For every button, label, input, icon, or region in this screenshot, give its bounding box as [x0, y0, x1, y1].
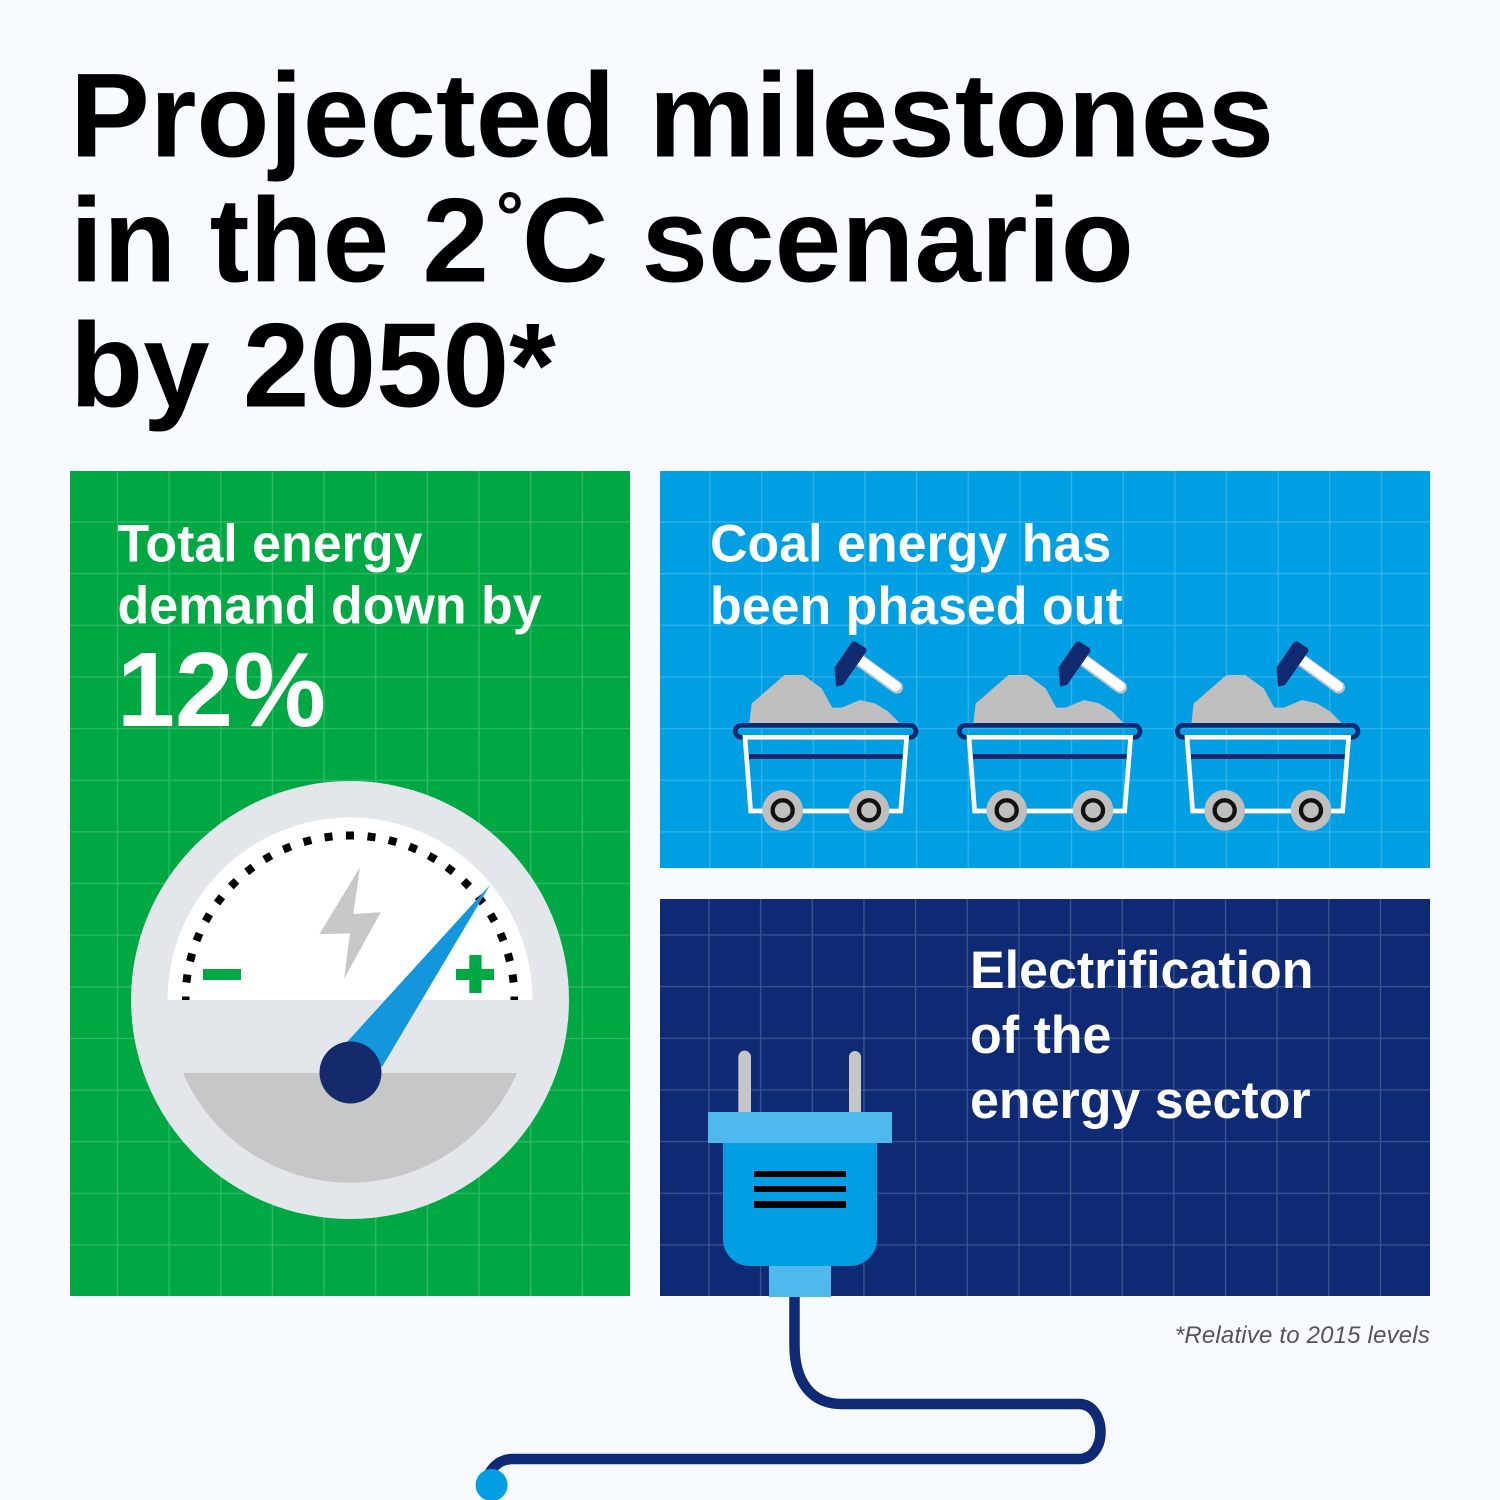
- icon: cord end: [476, 1469, 508, 1500]
- heading: electrification of the energy sector: [970, 942, 1313, 1130]
- title: in the 2: [70, 174, 489, 308]
- heading: total energy demand down by: [118, 515, 542, 636]
- stat: 12%: 12%: [117, 631, 326, 749]
- heading: coal energy has been phased out: Coal energy has: [710, 515, 1111, 574]
- heading: electrification of the energy sector: energy sector: [970, 1072, 1311, 1130]
- footnote: *Relative to 2015 levels: [1175, 1322, 1430, 1349]
- heading: electrification of the energy sector: Electrification: [970, 942, 1313, 1000]
- heading: total energy demand down by: demand down by: [118, 577, 542, 636]
- title: C scenario: [522, 174, 1134, 308]
- title: °: [496, 177, 524, 256]
- icon: coal cart 3: [1177, 642, 1358, 831]
- icon: coal cart 2: [959, 642, 1140, 831]
- icon: coal cart 1: [735, 642, 916, 831]
- heading: coal energy has been phased out: [710, 515, 1123, 636]
- icon: plug: [708, 1051, 892, 1297]
- heading: coal energy has been phased out: been phased out: [710, 578, 1123, 636]
- panel: total energy demand: [70, 471, 630, 1296]
- heading: total energy demand down by: Total energy: [118, 515, 422, 574]
- title: Projected milestones: [70, 49, 1274, 183]
- icon: power cord: [489, 1296, 1100, 1474]
- title: [70, 49, 1274, 433]
- heading: electrification of the energy sector: of the: [970, 1007, 1111, 1065]
- panel: coal energy: [660, 471, 1430, 868]
- title: by 2050*: [70, 299, 556, 433]
- panel: electrification: [660, 899, 1430, 1296]
- icon: energy gauge: [131, 781, 569, 1219]
